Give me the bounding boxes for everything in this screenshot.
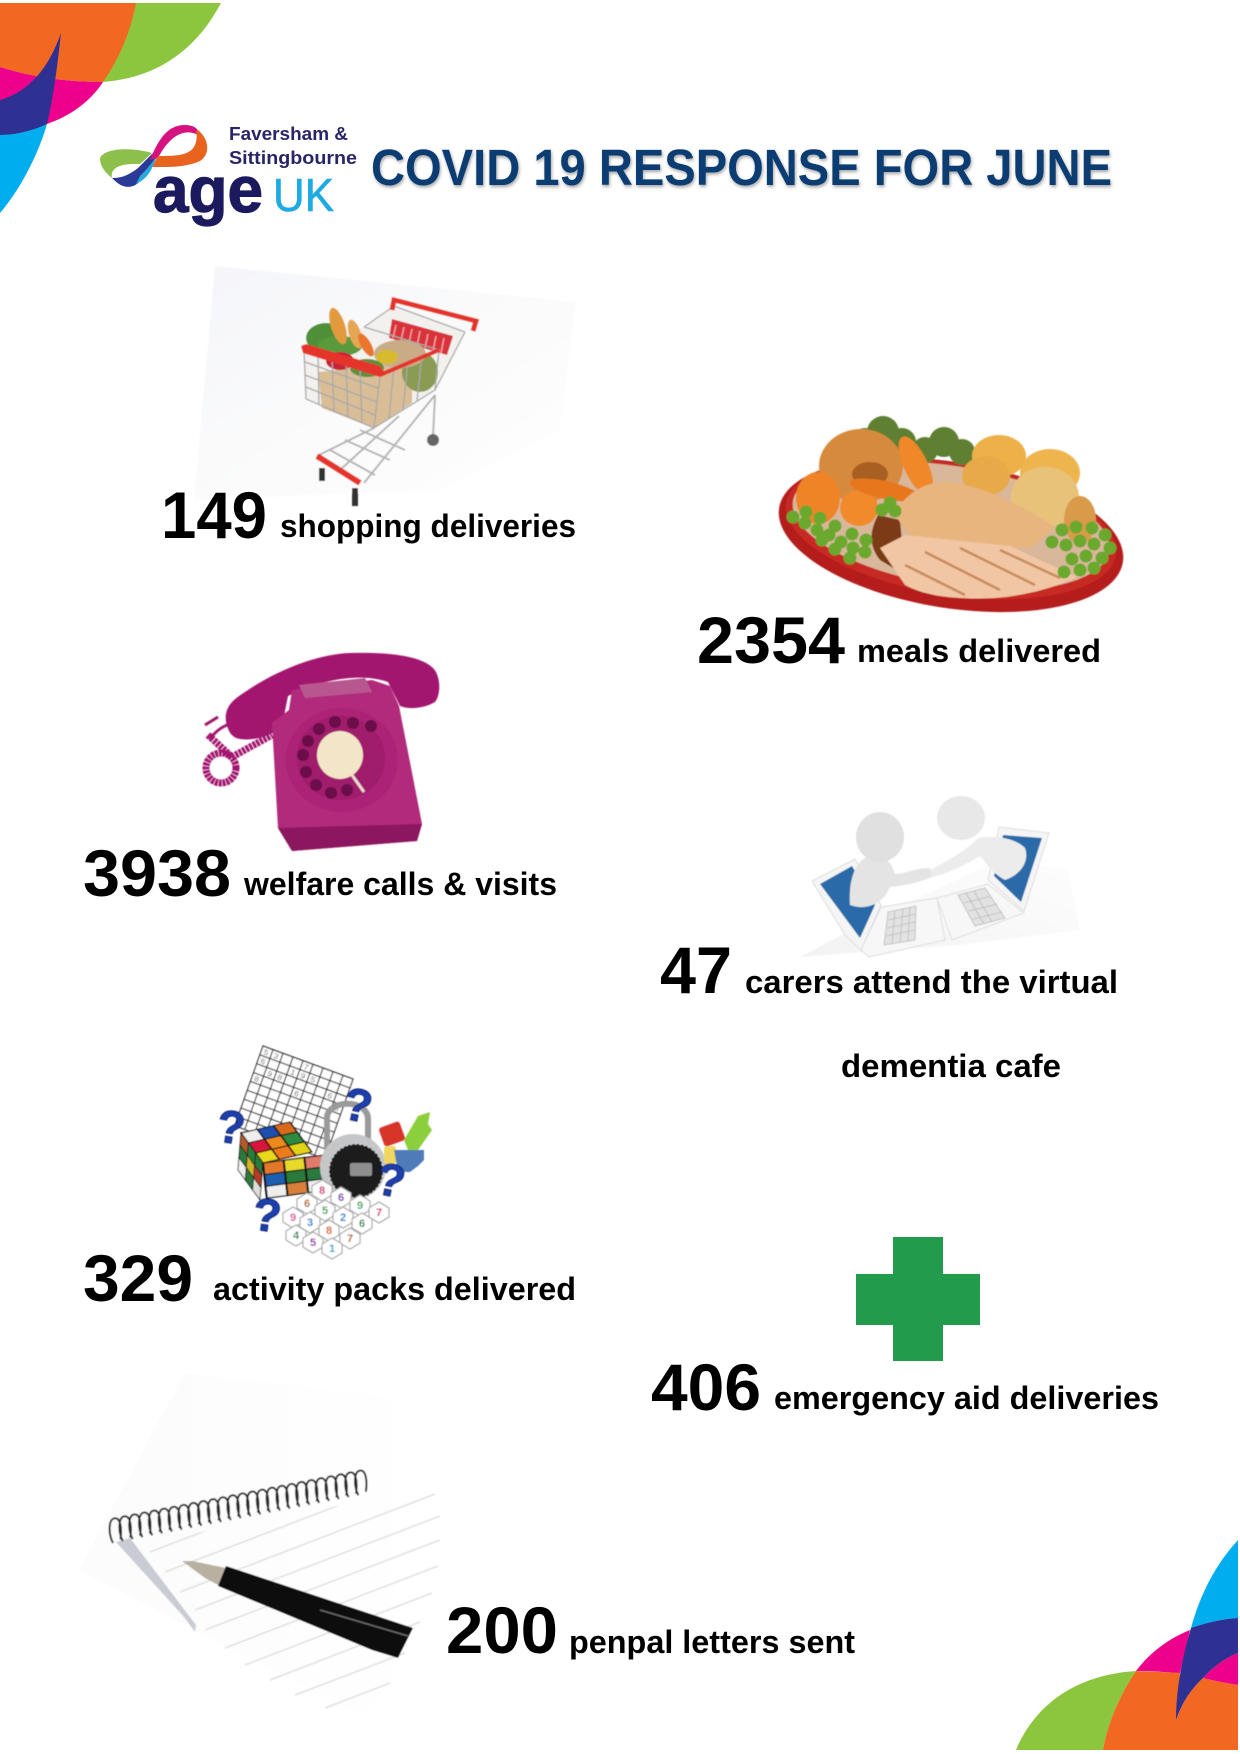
label: dementia cafe: dementia cafe bbox=[841, 1048, 1061, 1084]
stat: 47: 47 bbox=[660, 933, 732, 1007]
image: notepad and pen bbox=[108, 1468, 440, 1709]
image: shopping trolley bbox=[194, 266, 576, 506]
combination lock bbox=[320, 1104, 386, 1200]
image: roast dinner plate bbox=[768, 416, 1134, 634]
hexagon number puzzle: 9 bbox=[290, 1212, 296, 1224]
hexagon number puzzle: 4 bbox=[293, 1230, 300, 1242]
hexagon number puzzle: 6 bbox=[304, 1198, 310, 1210]
hexagon number puzzle: 9 bbox=[357, 1200, 363, 1212]
hexagon number puzzle: 8 bbox=[319, 1185, 325, 1197]
hexagon number puzzle: 6 bbox=[359, 1218, 365, 1230]
stat: 2354: 2354 bbox=[697, 603, 845, 677]
image: rotary telephone bbox=[205, 653, 439, 851]
label: carers attend the virtual: carers attend the virtual bbox=[745, 964, 1118, 1000]
rubik cube bbox=[238, 1122, 329, 1200]
logo: Faversham & Sittingbourne Age UK bbox=[100, 124, 357, 226]
corner decoration: bottom right bbox=[1016, 1540, 1238, 1750]
stat: 200: 200 bbox=[446, 1593, 558, 1667]
label: penpal letters sent: penpal letters sent bbox=[569, 1624, 855, 1660]
question marks bbox=[214, 1077, 410, 1243]
question marks: ? bbox=[372, 1152, 410, 1208]
hexagon number puzzle bbox=[283, 1180, 389, 1259]
hexagon number puzzle: 2 bbox=[340, 1212, 346, 1224]
jigsaw pieces bbox=[378, 1112, 432, 1172]
panel: activity packs delivered bbox=[83, 1046, 576, 1315]
hexagon number puzzle: 7 bbox=[376, 1207, 382, 1219]
image: figures shaking hands through laptops bbox=[800, 796, 1080, 957]
hexagon number puzzle: 3 bbox=[307, 1217, 313, 1229]
logo text: Sittingbourne: Sittingbourne bbox=[229, 148, 357, 168]
sudoku grid bbox=[235, 1046, 353, 1159]
panel: penpal letters sent bbox=[108, 1468, 855, 1709]
label: shopping deliveries: shopping deliveries bbox=[280, 508, 576, 544]
icon: first aid cross bbox=[856, 1237, 980, 1361]
label: welfare calls and visits: welfare calls & visits bbox=[243, 866, 557, 902]
hexagon number puzzle: 1 bbox=[329, 1243, 335, 1255]
hexagon number puzzle: 8 bbox=[326, 1225, 332, 1237]
hexagon number puzzle: 5 bbox=[322, 1205, 328, 1217]
panel: carers attend virtual dementia cafe bbox=[660, 796, 1118, 1084]
hexagon number puzzle: 6 bbox=[338, 1192, 344, 1204]
logo text: Faversham &: Faversham & bbox=[229, 124, 348, 144]
question marks: ? bbox=[214, 1099, 249, 1155]
question marks: ? bbox=[249, 1187, 285, 1243]
stat: 3938: 3938 bbox=[83, 836, 231, 910]
hexagon number puzzle: 5 bbox=[310, 1237, 316, 1249]
corner decoration: top left bbox=[0, 3, 221, 213]
title: COVID 19 RESPONSE FOR JUNE bbox=[371, 139, 1112, 196]
label: meals delivered: meals delivered bbox=[857, 633, 1101, 669]
logo text: UK: UK bbox=[273, 169, 334, 221]
panel: shopping deliveries bbox=[161, 266, 576, 552]
logo ribbon bbox=[100, 125, 207, 187]
panel: emergency aid deliveries bbox=[651, 1237, 1159, 1424]
hexagon number puzzle: 7 bbox=[347, 1233, 353, 1245]
image: puzzles collage bbox=[214, 1046, 432, 1259]
stat: 406: 406 bbox=[651, 1350, 761, 1424]
question marks: ? bbox=[339, 1077, 377, 1133]
panel: welfare calls and visits bbox=[83, 653, 557, 910]
label: emergency aid deliveries: emergency aid deliveries bbox=[774, 1380, 1159, 1416]
logo text: age: age bbox=[153, 153, 263, 226]
stat: 329: 329 bbox=[83, 1241, 193, 1315]
stat: 149: 149 bbox=[161, 478, 267, 552]
label: activity packs delivered: activity packs delivered bbox=[213, 1271, 576, 1307]
panel: meals delivered bbox=[697, 416, 1134, 677]
